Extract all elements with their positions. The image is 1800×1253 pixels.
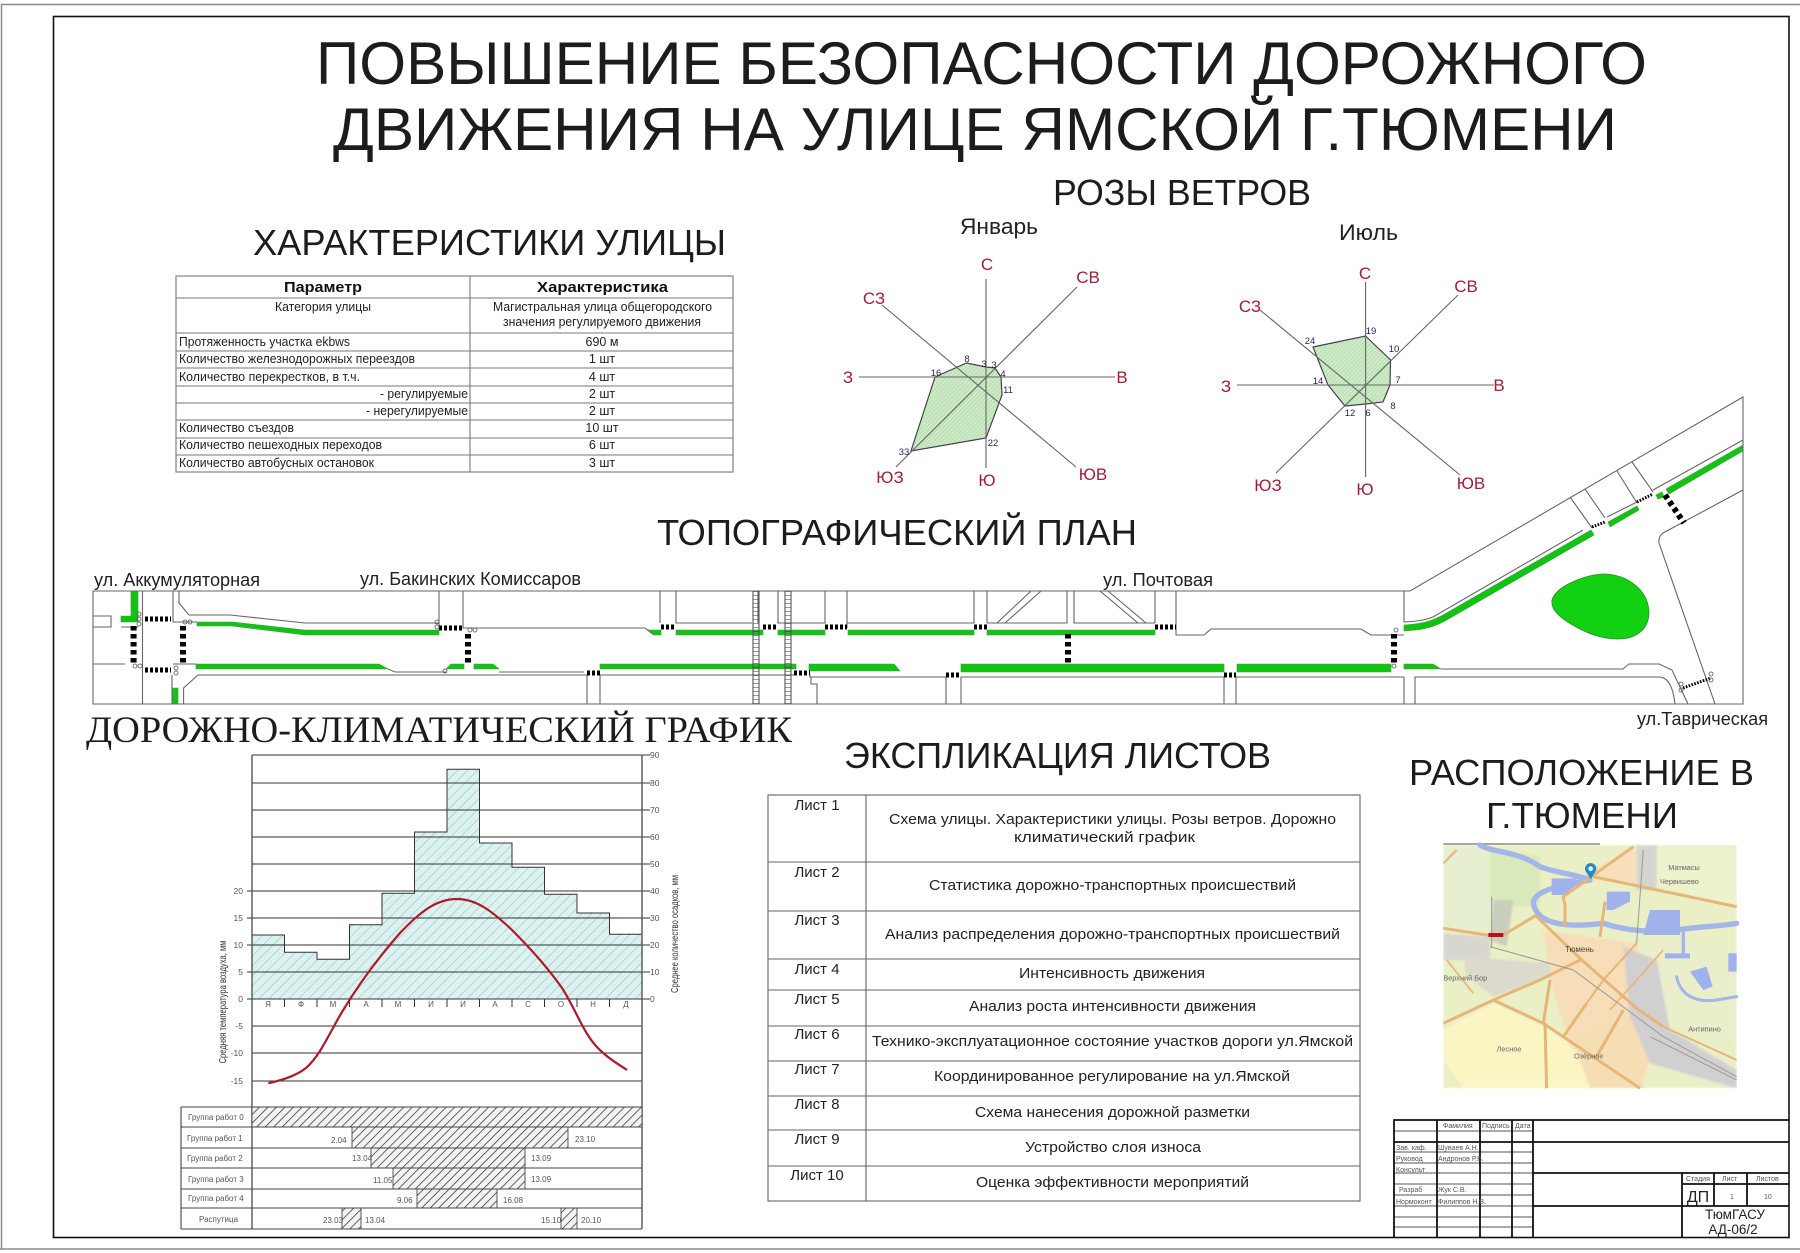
- title block: Разраб: [1399, 1186, 1422, 1194]
- table: sheet explication: [768, 795, 1360, 1201]
- table: street characteristics: Протяженность участка ekbws: [179, 335, 350, 349]
- table: street characteristics: 10 шт: [585, 421, 619, 435]
- table: sheet explication: Интенсивность движения: [1019, 965, 1205, 982]
- title block: Зав. каф.: [1396, 1145, 1427, 1152]
- title block: Нормоконт: [1396, 1199, 1432, 1206]
- precipitation axis: 50: [650, 859, 660, 869]
- month labels: С: [525, 1000, 531, 1009]
- map: rail lines: [1490, 850, 1737, 1080]
- map: place names: Озёрное: [1574, 1052, 1603, 1061]
- chart: wind rose July: 10: [1389, 344, 1399, 355]
- heading: topographic plan: ТОПОГРАФИЧЕСКИЙ ПЛАН: [657, 511, 1137, 553]
- works schedule table: 13.04: [365, 1216, 386, 1225]
- chart: wind rose July: 7: [1395, 375, 1401, 386]
- title block: ДП: [1687, 1189, 1709, 1206]
- chart: wind rose January: 11: [1003, 385, 1013, 396]
- table: sheet explication: Лист 2: [794, 864, 840, 881]
- precipitation axis: [650, 750, 660, 1004]
- table: sheet explication: Оценка эффективности мероприятий: [976, 1174, 1249, 1191]
- title block: Подпись: [1482, 1123, 1510, 1130]
- works schedule table: 13.04: [352, 1154, 373, 1163]
- month labels: М: [395, 1000, 402, 1009]
- table: street characteristics: Магистральная улица общегородского: [493, 300, 712, 314]
- chart: wind rose January: ЮВ: [1079, 465, 1107, 484]
- chart: wind rose January: [843, 214, 1128, 490]
- chart: wind rose January: 8: [964, 354, 970, 365]
- map: place names: [1443, 863, 1721, 1061]
- chart: wind rose January: 33: [899, 447, 909, 458]
- precipitation axis: 90: [650, 750, 660, 760]
- title block: Фамилия: [1443, 1123, 1473, 1130]
- heading: street characteristics: ХАРАКТЕРИСТИКИ УЛИЦЫ: [253, 222, 726, 263]
- map: place names: Матмасы: [1668, 863, 1700, 872]
- month labels: Д: [623, 1000, 629, 1009]
- map: water: [1480, 845, 1737, 1001]
- chart: wind rose January: 3: [981, 359, 987, 370]
- temperature axis: -10: [231, 1048, 243, 1058]
- chart: wind rose July: 8: [1390, 401, 1396, 412]
- works schedule table: 13.09: [531, 1175, 552, 1184]
- plan: green park area: [1552, 574, 1649, 639]
- table: street characteristics: 1 шт: [589, 352, 615, 366]
- works schedule table: 2.04: [331, 1136, 347, 1145]
- heading: location in Tyumen: [1409, 752, 1754, 836]
- plan: pedestrian crossings: [134, 494, 1711, 688]
- table: street characteristics: Характеристика: [537, 279, 669, 296]
- chart: wind rose January: СВ: [1076, 268, 1100, 287]
- map: place names: Червишево: [1660, 877, 1699, 886]
- month labels: И: [460, 1000, 466, 1009]
- title block: ТюмГАСУ: [1705, 1207, 1765, 1222]
- chart: wind rose January: 16: [931, 368, 941, 379]
- title block: 1: [1730, 1194, 1734, 1201]
- table: street characteristics: Количество автобусных остановок: [179, 456, 375, 470]
- title: ДВИЖЕНИЯ НА УЛИЦЕ ЯМСКОЙ Г.ТЮМЕНИ: [333, 96, 1617, 163]
- temperature axis: -15: [231, 1076, 243, 1086]
- temperature axis: -5: [235, 1021, 243, 1031]
- table: street characteristics: 2 шт: [589, 387, 615, 401]
- chart: wind rose July: СВ: [1454, 277, 1478, 296]
- precipitation axis: 60: [650, 832, 660, 842]
- topographic plan: [93, 397, 1743, 704]
- chart: wind rose July: 24: [1305, 336, 1315, 347]
- table: street characteristics: 2 шт: [589, 404, 615, 418]
- month labels: И: [428, 1000, 434, 1009]
- title block: АД-06/2: [1708, 1222, 1758, 1237]
- map: place names: Антипино: [1688, 1025, 1721, 1034]
- street labels: ул. Аккумуляторная: [94, 570, 260, 590]
- title block: Руковод: [1396, 1156, 1423, 1163]
- chart: wind rose January: 22: [988, 438, 998, 449]
- table: street characteristics: Количество пешеходных переходов: [179, 438, 382, 452]
- plan: crossing markers: [133, 612, 1713, 692]
- table: sheet explication: Лист 3: [794, 912, 840, 929]
- temperature axis: 20: [234, 886, 243, 896]
- works schedule table: Группа работ 2: [187, 1154, 243, 1163]
- table: sheet explication: Схема нанесения дорожной разметки: [975, 1104, 1250, 1121]
- chart: wind rose July: Июль: [1339, 220, 1398, 245]
- map: top edge mark: [1443, 841, 1600, 846]
- street labels: ул. Почтовая: [1103, 570, 1213, 590]
- chart: road climate: Среднее количество осадков, мм: [670, 875, 681, 993]
- grid lines: [247, 755, 650, 1229]
- title block: Филиппов Н.В.: [1438, 1199, 1486, 1206]
- month labels: Ф: [298, 1000, 304, 1009]
- month labels: М: [330, 1000, 337, 1009]
- table: sheet explication: Лист 9: [794, 1131, 840, 1148]
- table: sheet explication: Лист 1: [794, 797, 840, 814]
- map: lakes: [1552, 878, 1737, 990]
- table: street characteristics: 690 м: [586, 335, 618, 349]
- chart: wind rose January: С: [981, 255, 993, 274]
- heading: road climate chart: ДОРОЖНО-КЛИМАТИЧЕСКИЙ ГРАФИК: [86, 709, 792, 751]
- works schedule table: 11.05: [373, 1176, 393, 1185]
- title block: Андронов Р.В.: [1438, 1156, 1484, 1163]
- table: sheet explication: Лист 6: [794, 1026, 840, 1043]
- table: sheet explication: Лист 4: [794, 961, 840, 978]
- precipitation axis: 10: [650, 967, 660, 977]
- chart: wind rose January: Январь: [960, 214, 1038, 239]
- chart: wind rose July: В: [1493, 376, 1505, 395]
- title block: [1394, 1120, 1789, 1238]
- table: sheet explication: климатический график: [1014, 829, 1195, 846]
- temperature axis: 0: [238, 994, 243, 1004]
- table: sheet explication: Координированное регулирование на ул.Ямской: [934, 1068, 1290, 1085]
- table: street characteristics: 6 шт: [589, 438, 615, 452]
- title: [316, 30, 1647, 163]
- plan: road outlines: [93, 397, 1743, 704]
- chart: wind rose January: СЗ: [863, 289, 885, 308]
- axis titles: Средняя температура воздуха, мм: [218, 940, 229, 1064]
- chart: wind rose July: ЮЗ: [1254, 476, 1282, 495]
- works schedule table: 23.10: [575, 1135, 596, 1144]
- table: sheet explication: Лист 10: [790, 1167, 844, 1184]
- chart: wind rose January: ЮЗ: [876, 468, 904, 487]
- temperature curve: [268, 899, 627, 1083]
- map: place names: Лесное: [1497, 1045, 1521, 1054]
- title block: Листов: [1756, 1176, 1779, 1183]
- chart: wind rose July: С: [1359, 264, 1371, 283]
- chart: wind rose July: ЮВ: [1457, 474, 1485, 493]
- table: street characteristics: [176, 276, 733, 472]
- month labels: А: [492, 1000, 498, 1009]
- chart: wind rose January: 4: [1000, 369, 1006, 380]
- table: street characteristics: Количество перекрестков, в т.ч.: [179, 370, 360, 384]
- street labels: [94, 569, 1768, 729]
- table: sheet explication: Статистика дорожно-транспортных происшествий: [929, 877, 1296, 894]
- heading: location in Tyumen: Г.ТЮМЕНИ: [1486, 795, 1678, 836]
- precipitation axis: 70: [650, 805, 660, 815]
- table: street characteristics: 4 шт: [589, 370, 615, 384]
- table: street characteristics: 3 шт: [589, 456, 615, 470]
- works schedule table: Группа работ 0: [188, 1113, 244, 1122]
- works schedule table: 9.06: [397, 1196, 413, 1205]
- chart: wind rose July: З: [1221, 377, 1231, 396]
- month labels: Н: [590, 1000, 596, 1009]
- chart: wind rose July: 14: [1313, 376, 1323, 387]
- title: ПОВЫШЕНИЕ БЕЗОПАСНОСТИ ДОРОЖНОГО: [316, 30, 1647, 97]
- table: sheet explication: Анализ распределения дорожно-транспортных происшествий: [885, 926, 1340, 943]
- table: sheet explication: Устройство слоя износа: [1025, 1139, 1202, 1156]
- temperature axis: 15: [234, 913, 243, 923]
- precipitation axis: 0: [650, 994, 655, 1004]
- chart: wind rose July: [1221, 220, 1505, 499]
- temperature axis: [231, 886, 243, 1086]
- temperature axis: 5: [238, 967, 243, 977]
- map: location pin: [1585, 863, 1596, 879]
- works schedule table: 15.10: [541, 1216, 562, 1225]
- works schedule table: 13.09: [531, 1154, 552, 1163]
- table: street characteristics: Категория улицы: [275, 300, 371, 314]
- table: sheet explication: Анализ роста интенсивности движения: [969, 998, 1256, 1015]
- map: highlighted street: [1488, 929, 1503, 941]
- title block: 10: [1764, 1194, 1772, 1201]
- title block: Консульт: [1396, 1167, 1426, 1174]
- chart: wind rose July: 12: [1345, 408, 1355, 419]
- table: street characteristics: - нерегулируемые: [366, 404, 468, 418]
- chart: wind rose January: В: [1116, 368, 1128, 387]
- table: sheet explication: Лист 8: [794, 1096, 840, 1113]
- month labels: Я: [265, 1000, 271, 1009]
- heading: sheet explication: ЭКСПЛИКАЦИЯ ЛИСТОВ: [844, 735, 1271, 776]
- chart: wind rose January: 3: [991, 360, 997, 371]
- table: sheet explication: Лист 5: [794, 991, 840, 1008]
- month labels: О: [558, 1000, 564, 1009]
- works schedule table: Группа работ 3: [188, 1175, 244, 1184]
- precipitation axis: 20: [650, 940, 660, 950]
- map: base layers: [1443, 845, 1737, 1088]
- chart: wind rose July: 6: [1365, 408, 1371, 419]
- table: sheet explication: Лист 7: [794, 1061, 840, 1078]
- works schedule table: 23.03: [323, 1216, 344, 1225]
- table: street characteristics: Количество съездов: [179, 421, 294, 435]
- title block: Жук С.В.: [1438, 1187, 1467, 1194]
- title block: Дата: [1515, 1123, 1531, 1130]
- plan: railway crossing: [753, 591, 791, 704]
- works schedule table: 20.10: [581, 1216, 602, 1225]
- table: street characteristics: Параметр: [284, 279, 362, 296]
- heading: location in Tyumen: РАСПОЛОЖЕНИЕ В: [1409, 752, 1754, 793]
- precipitation axis: 30: [650, 913, 660, 923]
- street labels: ул.Таврическая: [1637, 709, 1768, 729]
- works schedule table: 16.08: [503, 1196, 524, 1205]
- month labels: А: [363, 1000, 369, 1009]
- table: street characteristics: значения регулируемого движения: [503, 315, 701, 329]
- precipitation bars: [252, 769, 642, 999]
- title block: Стадия: [1686, 1176, 1710, 1183]
- table: street characteristics: - регулируемые: [380, 387, 468, 401]
- temperature axis: 10: [234, 940, 243, 950]
- location map: [1443, 844, 1737, 1088]
- table: street characteristics: Количество железнодорожных переездов: [179, 352, 415, 366]
- chart: road climate: [181, 750, 681, 1229]
- chart: wind rose January: З: [843, 368, 853, 387]
- works schedule table: Группа работ 1: [187, 1134, 243, 1143]
- map: place names: Тюмень: [1565, 945, 1594, 954]
- table: sheet explication: Схема улицы. Характеристики улицы. Розы ветров. Дорожно: [889, 811, 1336, 828]
- chart: wind rose July: 19: [1366, 326, 1376, 337]
- table: sheet explication: Технико-эксплуатационное состояние участков дороги ул.Ямской: [872, 1033, 1353, 1050]
- month labels: [265, 1000, 629, 1009]
- chart: wind rose July: Ю: [1356, 480, 1374, 499]
- chart: wind rose July: СЗ: [1239, 297, 1261, 316]
- precipitation axis: 80: [650, 778, 660, 788]
- map: roads: [1443, 847, 1737, 1088]
- precipitation axis: 40: [650, 886, 660, 896]
- works schedule table: [181, 1107, 642, 1229]
- title block: Лист: [1722, 1176, 1738, 1183]
- chart: wind rose January: Ю: [978, 471, 996, 490]
- works schedule table: Распутица: [199, 1215, 239, 1224]
- heading: wind roses: РОЗЫ ВЕТРОВ: [1053, 172, 1311, 213]
- street labels: ул. Бакинских Комиссаров: [360, 569, 581, 589]
- plan: green strips: [121, 445, 1743, 704]
- map: place names: Верхний Бор: [1443, 974, 1487, 983]
- works schedule table: Группа работ 4: [188, 1194, 244, 1203]
- title block: Шуваев А.Н.: [1438, 1145, 1479, 1152]
